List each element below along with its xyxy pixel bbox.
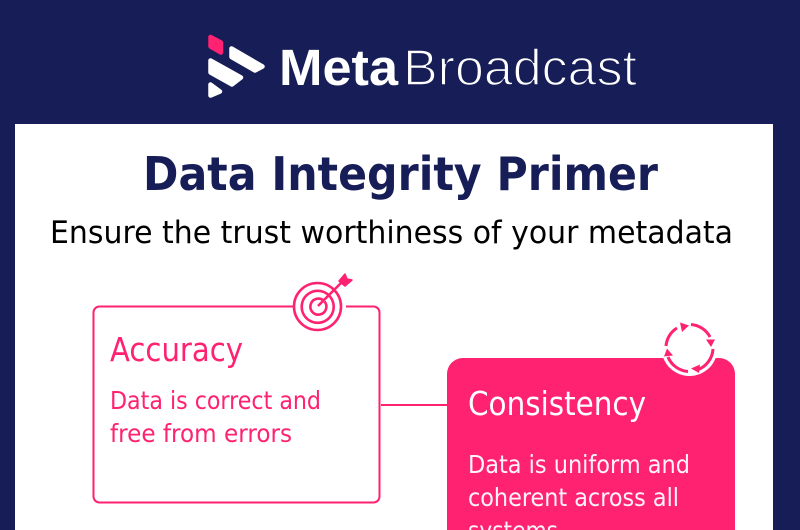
logo: MetaBroadcast xyxy=(210,37,637,96)
icon: cycle arrows xyxy=(662,320,718,376)
logo wordmark: Broadcast xyxy=(403,39,637,96)
card text: accuracy xyxy=(110,386,321,448)
logo wordmark xyxy=(279,39,637,96)
icon: target with arrow xyxy=(294,274,352,330)
connector between cards xyxy=(381,404,448,406)
logo wordmark: Meta xyxy=(279,39,399,96)
card text: accuracy: Data is correct and xyxy=(110,386,321,415)
card outline xyxy=(94,306,380,502)
card text: accuracy: free from errors xyxy=(110,419,292,448)
icon: logo mark xyxy=(210,37,262,96)
card text: consistency: coherent across all xyxy=(468,483,679,512)
panel: accuracy card xyxy=(94,306,380,502)
panel: consistency card xyxy=(447,358,735,530)
panel: white content area xyxy=(15,124,773,530)
title: Data Integrity Primer xyxy=(143,147,658,201)
card heading: accuracy: Accuracy xyxy=(110,330,243,369)
card text: consistency xyxy=(468,450,690,530)
card background xyxy=(447,358,735,530)
card text: consistency: Data is uniform and xyxy=(468,450,690,479)
subtitle: Ensure the trust worthiness of your metadata xyxy=(50,215,733,251)
card heading: consistency: Consistency xyxy=(468,384,646,423)
